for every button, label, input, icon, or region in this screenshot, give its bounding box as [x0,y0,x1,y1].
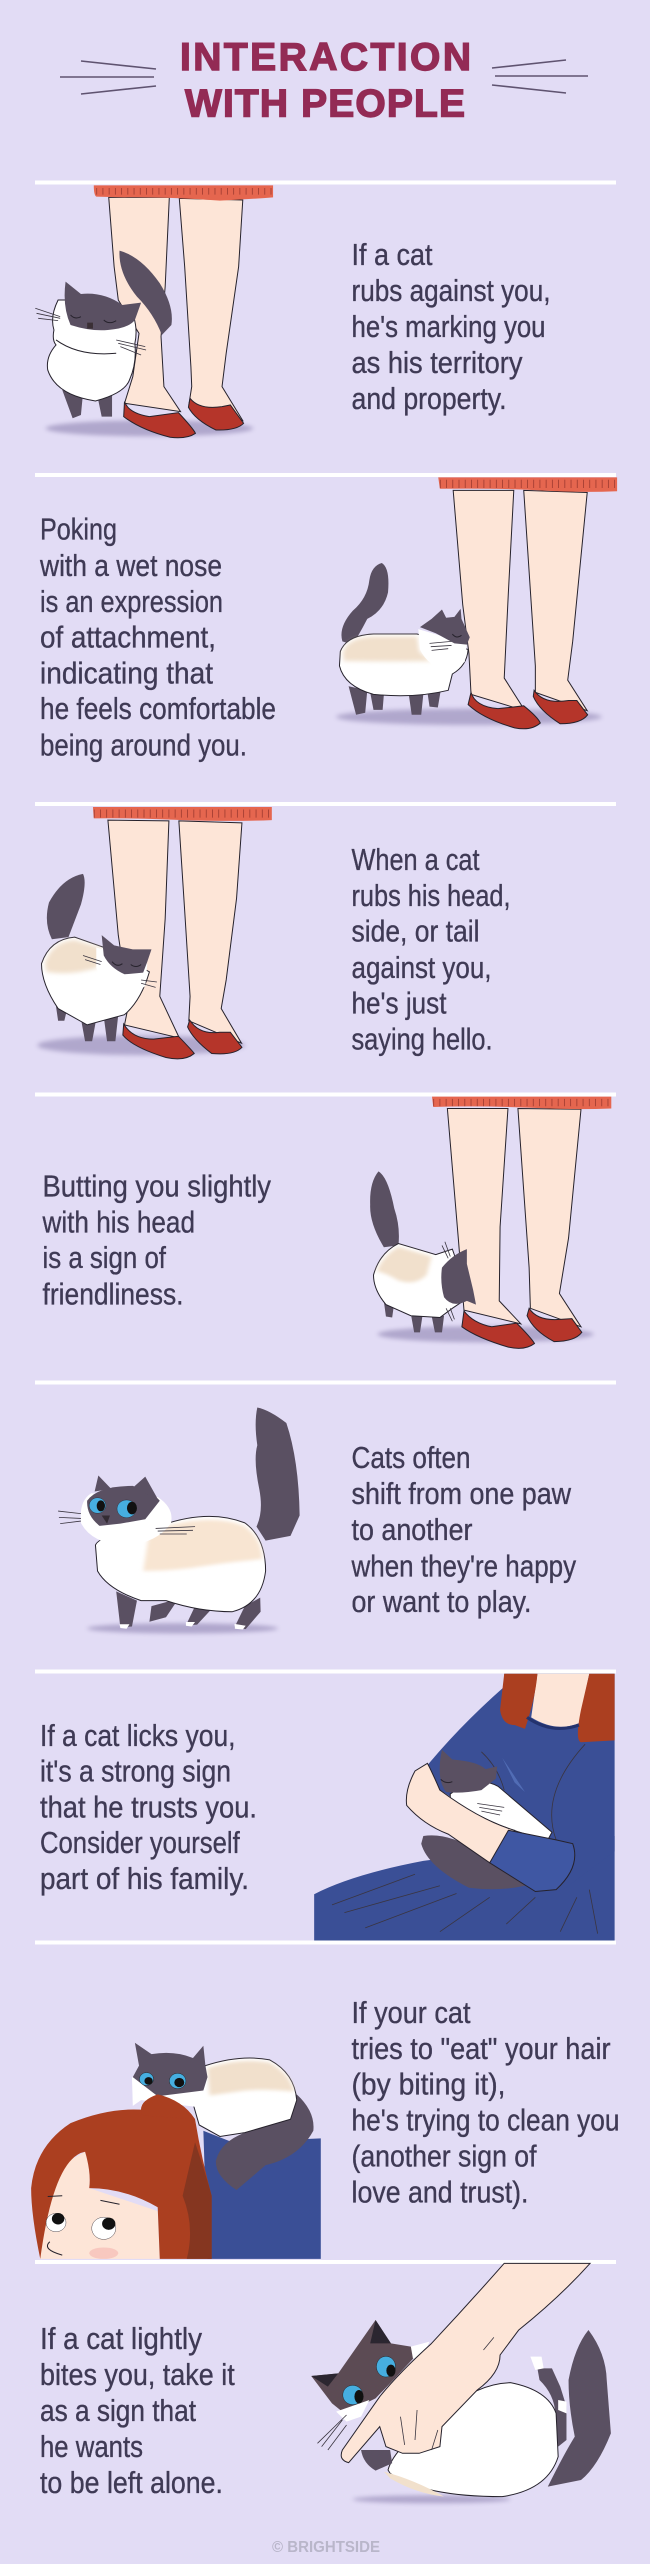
credit: © BRIGHTSIDE [272,2539,380,2556]
panel: poking [39,477,617,762]
text: hello: he's just [352,986,447,1020]
text: eating hair: love and trust). [352,2174,528,2210]
icon: left whisker lines [60,61,156,94]
panel: butting [42,1097,611,1348]
text: poking: he feels comfortable [40,691,276,726]
text: hello: When a cat [352,842,480,877]
illustration: cat poking leg [336,477,617,729]
title [180,36,471,126]
text: licking: Consider yourself [40,1825,240,1860]
illustration: legs and cat rubbing [35,185,273,438]
panel: marking [35,185,550,438]
panel: hello [37,807,510,1059]
text: butting: Butting you slightly [42,1168,271,1204]
text: shifting paws [351,1440,577,1619]
text: hello: saying hello. [352,1022,492,1056]
text: butting [42,1168,271,1312]
text: marking: and property. [352,381,506,416]
text: shifting paws: to another [352,1512,472,1547]
text: biting [40,2321,235,2500]
text: poking: is an expression [40,584,223,619]
panel: shifting paws [58,1407,577,1634]
text: shifting paws: shift from one paw [352,1476,572,1511]
text: poking: with a wet nose [39,548,222,583]
illustration: woman holding cat [314,1674,615,1941]
text: licking: part of his family. [40,1861,249,1896]
illustration: cat butting leg [370,1097,611,1348]
title: WITH PEOPLE [185,83,465,126]
text: eating hair: If your cat [352,1995,471,2030]
text: butting: is a sign of [42,1240,166,1275]
panel: eating hair [31,1995,620,2259]
panel: biting [40,2263,611,2503]
text: eating hair: (another sign of [352,2138,537,2174]
text: hello: side, or tail [352,914,480,948]
text: shifting paws: when they're happy [351,1548,577,1584]
illustration: cat on woman's head [31,2043,321,2259]
panel: licking [40,1674,615,1941]
text: poking: of attachment, [40,620,216,654]
text: marking: rubs against you, [352,273,550,308]
text: licking: If a cat licks you, [40,1718,236,1753]
text: eating hair: (by biting it), [352,2066,506,2102]
title: INTERACTION [180,36,471,79]
text: biting: to be left alone. [40,2465,223,2500]
illustration: walking cat [58,1407,300,1634]
text: shifting paws: Cats often [352,1440,470,1475]
text: marking: If a cat [352,237,433,272]
illustration: cat rubbing head [37,807,272,1059]
text: biting: bites you, take it [40,2357,235,2392]
text: marking: he's marking you [352,309,546,344]
text: licking [40,1718,257,1896]
text: hello: against you, [352,950,492,985]
text: poking: being around you. [40,728,247,762]
text: biting: he wants [40,2429,143,2464]
text: marking [352,237,550,416]
illustration: hand petting cat [311,2263,611,2503]
text: hello [352,842,510,1056]
text: butting: with his head [42,1204,195,1240]
text: eating hair: tries to "eat" your hair [352,2031,610,2066]
text: poking: Poking [40,512,117,546]
text: hello: rubs his head, [352,878,510,913]
text: licking: it's a strong sign [40,1754,231,1788]
text: licking: that he trusts you. [40,1790,257,1824]
icon: right whisker lines [492,60,588,93]
text: butting: friendliness. [42,1276,184,1312]
text: biting: If a cat lightly [40,2321,202,2356]
text: poking [39,512,276,762]
text: shifting paws: or want to play. [352,1584,532,1619]
text: biting: as a sign that [40,2393,196,2428]
text: marking: as his territory [352,345,523,380]
text: eating hair [352,1995,620,2210]
text: poking: indicating that [40,656,213,690]
